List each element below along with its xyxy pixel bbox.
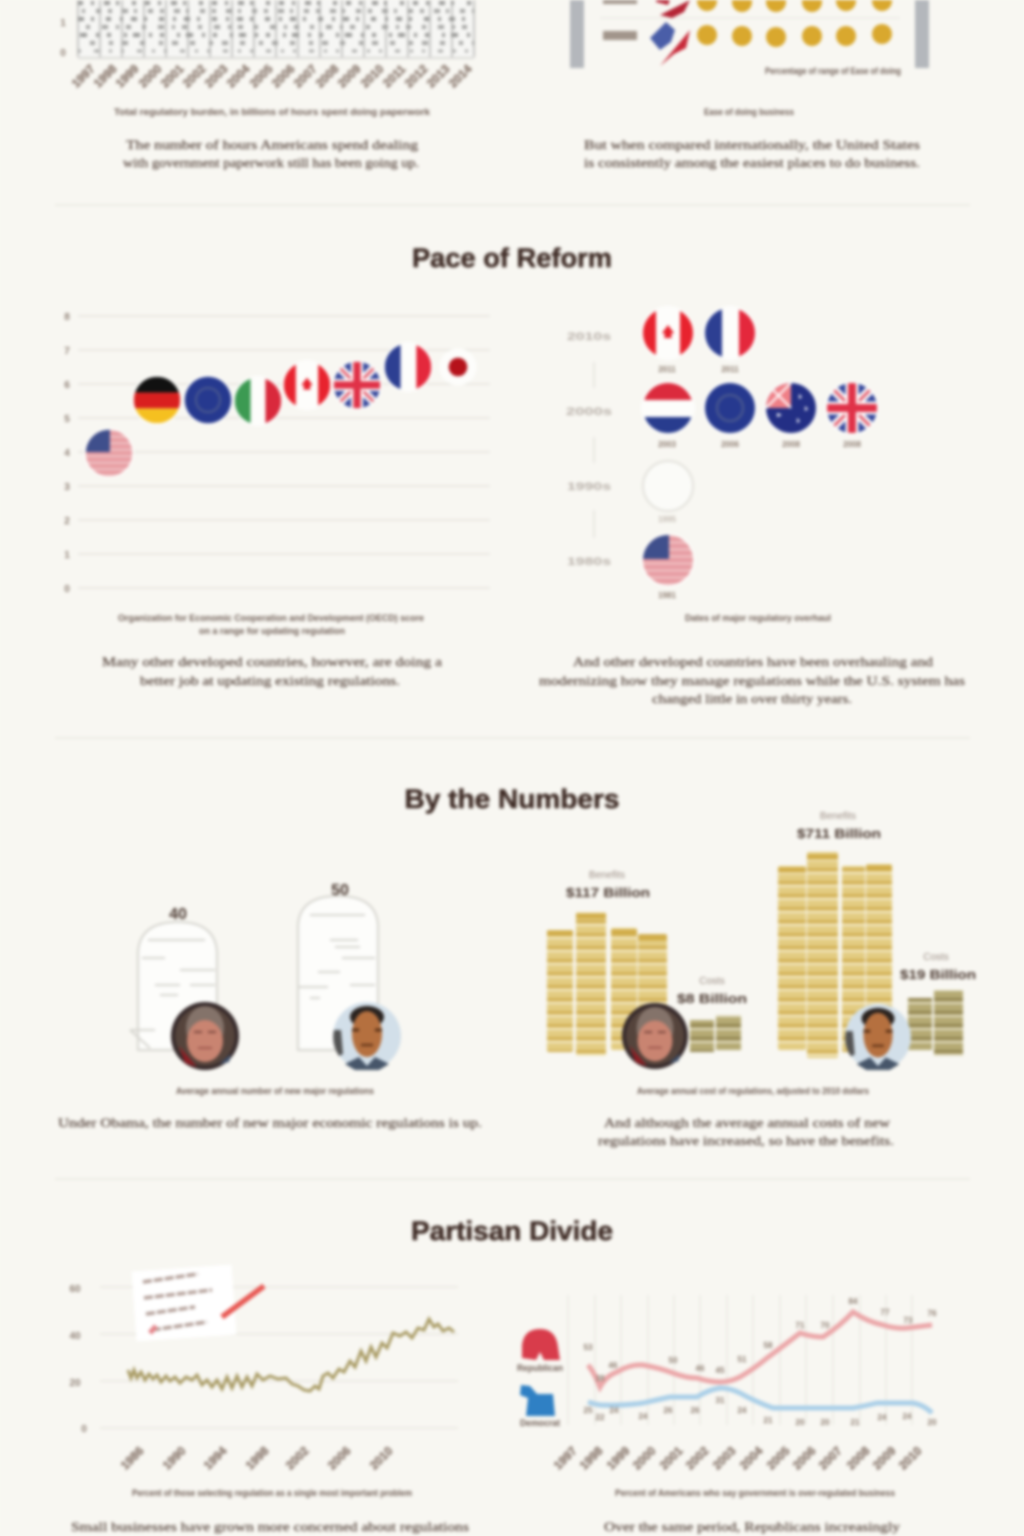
values: Democrats: 25 — [584, 1406, 593, 1415]
axis: year labels: 2000 — [630, 1444, 659, 1473]
values: Democrats: 24 — [738, 1406, 747, 1415]
axis: year labels — [551, 1444, 925, 1473]
axis: year labels: 2002 — [180, 62, 209, 91]
caption: Average annual cost of regulations, adjusted to 2010 dollars — [637, 1086, 869, 1096]
y axis: 0 — [81, 1424, 87, 1435]
y axis: 2 — [64, 516, 70, 527]
line: Democrats — [588, 1388, 932, 1413]
values: Republicans: 73 — [904, 1316, 913, 1325]
line chart: concern over time — [128, 1319, 454, 1391]
body text: And other developed countries have been overhauling and — [573, 654, 934, 669]
body text: Over the same period, Republicans increasingly — [604, 1519, 901, 1534]
democrats label: Democrat — [520, 1418, 560, 1428]
axis: year labels — [69, 62, 475, 91]
axis: year labels: 2005 — [247, 62, 276, 91]
axis: year labels: 2010 — [358, 62, 387, 91]
values: Republicans: 76 — [928, 1309, 937, 1318]
values: Republicans: 51 — [738, 1355, 747, 1364]
body text line 2: better job at updating existing regulations. — [140, 673, 400, 688]
axis: year labels: 1997 — [69, 62, 98, 91]
axis: year labels: 1999 — [113, 62, 142, 91]
document icon: Bush — [130, 922, 217, 1050]
document icon: Obama — [298, 896, 378, 1050]
axis: year labels: 2004 — [737, 1444, 766, 1473]
frame bars — [577, 0, 922, 68]
values: Democrats: 20 — [796, 1418, 805, 1427]
values: Democrats: 24 — [610, 1406, 619, 1415]
portrait: Obama — [845, 1004, 911, 1070]
axis: year labels: 1998 — [577, 1444, 606, 1473]
coins: Bush costs — [690, 1015, 741, 1052]
heading: by the numbers: By the Numbers — [404, 784, 620, 814]
values: Republicans: 38 — [596, 1374, 605, 1383]
axis: year labels: 2011 — [380, 62, 409, 90]
y axis — [64, 312, 70, 595]
y axis: 5 — [64, 414, 70, 425]
axis: year labels: 1986 — [118, 1444, 147, 1473]
labels: Costs — [923, 952, 949, 963]
flag: United States — [84, 428, 134, 478]
decade labels: 1990s — [567, 481, 611, 493]
values: Democrats: 26 — [691, 1406, 700, 1415]
year labels: 2006 — [721, 440, 739, 449]
y axis: 8 — [64, 312, 70, 323]
values: Republicans: 70 — [821, 1321, 830, 1330]
y axis: 4 — [64, 448, 70, 459]
caption: Percent of Americans who say government is over-regulated business — [615, 1488, 895, 1498]
panel: paperwork hours — [60, 0, 475, 170]
year labels — [658, 365, 861, 600]
axis: year labels: 2012 — [402, 62, 431, 91]
flag: Canada — [641, 306, 695, 360]
coins: Bush benefits — [547, 912, 667, 1056]
axis: year labels: 2010 — [367, 1444, 396, 1473]
republicans label: Republican — [517, 1363, 563, 1373]
values: Republicans: 50 — [669, 1356, 678, 1365]
portrait: Bush — [171, 1002, 239, 1070]
party icons bottom row — [650, 22, 690, 66]
row label — [603, 31, 637, 40]
axis: year labels: 2001 — [158, 62, 187, 91]
caption: Organization for Economic Cooperation and Development (OECD) score — [118, 613, 424, 623]
decade labels: 2010s — [567, 331, 611, 343]
y axis: 0 — [64, 584, 70, 595]
year labels: 2011 — [658, 365, 676, 374]
axis: year labels — [118, 1444, 396, 1473]
caption: Average annual number of new major regulations — [176, 1086, 374, 1096]
values: Democrats: 22 — [596, 1413, 605, 1422]
y axis: 60 — [69, 1284, 81, 1295]
values: Republicans: 46 — [609, 1361, 618, 1370]
body text: Many other developed countries, however, are doing a — [102, 654, 442, 669]
values: Republicans: 77 — [881, 1308, 890, 1317]
panel: ease of business ranking — [577, 0, 922, 170]
caption line 2: on a range for updating regulation — [199, 626, 345, 636]
values: Democrats: 31 — [716, 1396, 725, 1405]
axis: year labels: 1999 — [604, 1444, 633, 1473]
values: Democrats: 21 — [764, 1416, 773, 1425]
flag: United Kingdom — [825, 381, 879, 435]
heading: partisan divide: Partisan Divide — [411, 1216, 613, 1246]
values: Republicans — [584, 1297, 937, 1383]
year labels: 2008 — [782, 440, 800, 449]
values: Democrats: 21 — [851, 1418, 860, 1427]
decade labels: 2000s — [566, 406, 612, 418]
body text line 3: changed little in over thirty years. — [652, 691, 852, 706]
values: Democrats: 20 — [821, 1418, 830, 1427]
portrait: Obama — [333, 1002, 401, 1070]
axis: year labels: 2007 — [816, 1444, 845, 1473]
flag: New Zealand — [764, 381, 818, 435]
labels: $19 Billion — [900, 967, 976, 982]
panel: OECD score — [64, 312, 490, 688]
chart note: Percentage of range of Ease of doing — [765, 66, 901, 76]
axis: year labels: 2006 — [790, 1444, 819, 1473]
axis: year labels: 2004 — [224, 62, 253, 91]
axis: year labels: 2009 — [870, 1444, 899, 1473]
values: Republicans: 45 — [716, 1366, 725, 1375]
axis: year labels: 1997 — [551, 1444, 580, 1473]
body text: The number of hours Americans spend dealing — [126, 137, 419, 152]
axis: year labels: 2006 — [269, 62, 298, 91]
icon: donkey — [520, 1385, 555, 1416]
coins: Obama benefits — [778, 852, 892, 1058]
body text: Small businesses have grown more concerned about regulations — [71, 1519, 469, 1534]
y axis: 3 — [64, 482, 70, 493]
caption: Percent of those selecting regulation as a single most important problem — [132, 1488, 412, 1498]
flag: Canada — [282, 360, 332, 410]
body text line 2: modernizing how they manage regulations while the U.S. system has — [539, 673, 965, 688]
row lines — [600, 17, 900, 19]
axis: year labels: 2003 — [202, 62, 231, 91]
values: Republicans: 84 — [849, 1297, 858, 1306]
year labels: 1981 — [658, 591, 676, 600]
axis: year labels: 2000 — [136, 62, 165, 91]
axis: year labels: 2007 — [291, 62, 320, 91]
values: Republicans: 58 — [764, 1341, 773, 1350]
body text: Under Obama, the number of new major economic regulations is up. — [58, 1115, 482, 1130]
chart: hours dot table — [60, 0, 474, 59]
labels: $117 Billion — [566, 885, 650, 900]
values: Republicans: 71 — [796, 1321, 805, 1330]
flag: United Kingdom — [332, 360, 382, 410]
row label — [603, 0, 637, 4]
year labels: 2011 — [721, 365, 739, 374]
values: Democrats — [584, 1396, 937, 1427]
y axis: 1 — [64, 550, 70, 561]
axis: year labels: 2005 — [764, 1444, 793, 1473]
axis: year labels: 1994 — [201, 1444, 230, 1473]
caption: Total regulatory burden, in billions of hours spent doing paperwork — [114, 107, 431, 117]
axis: year labels: 2009 — [335, 62, 364, 91]
chart: hours dot table: 1 — [60, 18, 66, 29]
axis: year labels: 2008 — [313, 62, 342, 91]
axis: year labels: 2013 — [424, 62, 453, 91]
axis: year labels: 2010 — [896, 1444, 925, 1473]
flag: Italy — [233, 376, 283, 426]
y axis: 20 — [69, 1378, 81, 1389]
axis: year labels: 2002 — [283, 1444, 312, 1473]
body text line 2: regulations have increased, so have the benefits. — [598, 1133, 894, 1148]
body text: And although the average annual costs of new — [604, 1115, 891, 1130]
axis: year labels: 2006 — [325, 1444, 354, 1473]
flag: European Union — [703, 381, 757, 435]
flag: Japan — [439, 348, 477, 386]
chart: hours dot table: 0 — [60, 48, 66, 59]
body text line 2: with government paperwork still has been going up. — [123, 155, 419, 170]
axis: year labels: 2014 — [446, 62, 475, 91]
flag: Germany — [132, 375, 182, 425]
axis: year labels: 2001 — [657, 1444, 686, 1473]
portrait: Bush — [622, 1003, 688, 1069]
y axis: 40 — [69, 1331, 81, 1342]
values: Democrats: 26 — [664, 1406, 673, 1415]
y axis: 7 — [64, 346, 70, 357]
panel: small business concern — [69, 1265, 469, 1534]
panel: number of major regulations — [58, 882, 482, 1130]
axis: year labels: 2002 — [683, 1444, 712, 1473]
flag: France — [703, 306, 757, 360]
heading: pace of reform: Pace of Reform — [412, 243, 612, 273]
value: 50: 50 — [331, 882, 349, 899]
line: Republicans — [588, 1312, 932, 1387]
axis: year labels: 2008 — [844, 1444, 873, 1473]
coins: Obama costs — [908, 990, 963, 1056]
body text line 2: is consistently among the easiest places to do business. — [584, 155, 920, 170]
panel: costs and benefits — [547, 811, 976, 1148]
flag: France — [383, 342, 433, 392]
decade labels — [566, 331, 612, 568]
body text: But when compared internationally, the United States — [584, 137, 920, 152]
decade labels: 1980s — [567, 556, 611, 568]
year labels: 2008 — [843, 440, 861, 449]
caption: Ease of doing business — [704, 107, 794, 117]
panel: overhaul timeline — [539, 306, 965, 706]
labels: Benefits — [820, 811, 856, 822]
axis: year labels: 2003 — [710, 1444, 739, 1473]
icon: elephant — [522, 1329, 560, 1360]
values: Republicans: 53 — [584, 1343, 593, 1352]
y axis — [69, 1284, 87, 1435]
flag outline: empty — [643, 461, 693, 511]
values: Democrats: 24 — [903, 1412, 912, 1421]
values: Democrats: 24 — [639, 1412, 648, 1421]
axis: year labels: 1990 — [160, 1444, 189, 1473]
flag: United States — [641, 533, 695, 587]
flag: European Union — [183, 375, 233, 425]
values: Republicans: 46 — [696, 1364, 705, 1373]
icon: clipboard and pencil — [132, 1265, 264, 1341]
panel: partisan views — [517, 1295, 937, 1534]
year labels: 1995 — [658, 515, 676, 524]
flag: Netherlands — [641, 381, 695, 435]
caption: Dates of major regulatory overhaul — [685, 613, 831, 623]
year labels: 2003 — [658, 440, 676, 449]
axis: year labels: 1998 — [91, 62, 120, 91]
party icons top row — [656, 0, 690, 18]
labels: Benefits — [589, 870, 625, 881]
value: 40: 40 — [169, 906, 187, 923]
gold dots — [697, 0, 892, 47]
labels: $8 Billion — [677, 991, 747, 1006]
labels: $711 Billion — [797, 826, 881, 841]
labels — [566, 811, 976, 1006]
values: Democrats: 20 — [928, 1418, 937, 1427]
labels: Costs — [699, 976, 725, 987]
y axis: 6 — [64, 380, 70, 391]
values: Democrats: 24 — [878, 1413, 887, 1422]
axis: year labels: 1998 — [243, 1444, 272, 1473]
